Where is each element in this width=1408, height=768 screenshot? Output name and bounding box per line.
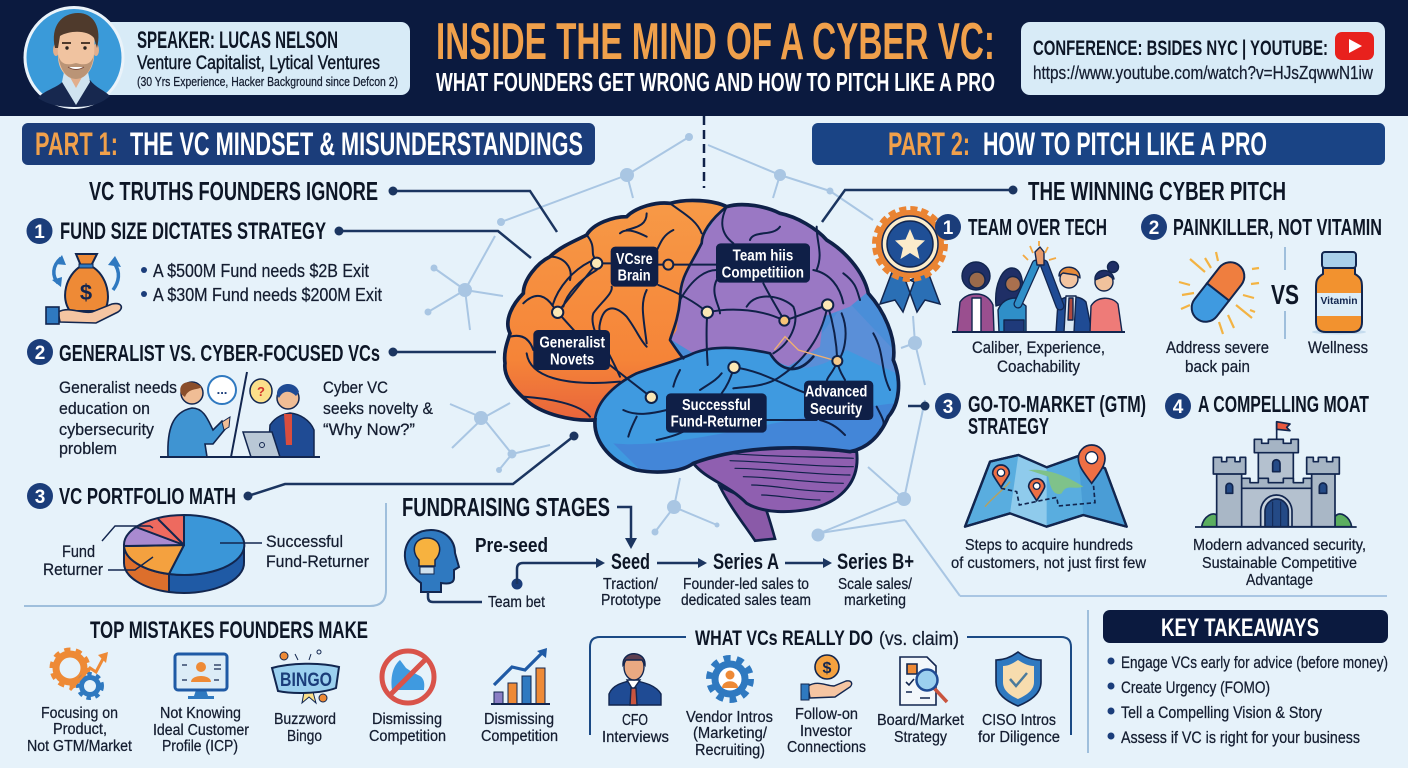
badge 1 bbox=[935, 214, 961, 240]
arrow: heading to seed bbox=[617, 507, 637, 549]
moat caption bbox=[1193, 537, 1366, 589]
badge 4: 4 bbox=[1173, 397, 1184, 418]
label: successful fund-returner bbox=[266, 532, 369, 571]
cyber VC text: seeks novelty & bbox=[323, 399, 434, 418]
painkiller caption: back pain bbox=[1185, 357, 1250, 376]
speaker name: SPEAKER: LUCAS NELSON bbox=[137, 27, 338, 54]
action: follow-on: Investor bbox=[800, 723, 852, 740]
icon: vitamin bottle bbox=[1312, 252, 1366, 334]
stage: seed: Seed bbox=[611, 549, 650, 574]
fund size bullets bbox=[141, 261, 382, 305]
icon: money bag and hand: $ bbox=[80, 280, 92, 305]
icon: gear with person bbox=[709, 658, 751, 700]
mistake: focusing on product bbox=[27, 705, 133, 755]
subtitle: WHAT FOUNDERS GET WRONG AND HOW TO PITCH LIKE A PRO bbox=[436, 67, 995, 97]
action: board strategy: Board/Market bbox=[877, 712, 965, 729]
GTM caption: Steps to acquire hundreds bbox=[965, 537, 1133, 554]
GTM caption bbox=[951, 537, 1146, 572]
label: fund returner bbox=[43, 542, 103, 579]
mistake: no ICP: Profile (ICP) bbox=[162, 738, 238, 755]
brain nodes bbox=[552, 258, 842, 403]
illustration: team high five bbox=[952, 241, 1125, 332]
connector bbox=[908, 402, 930, 410]
fund size heading: FUND SIZE DICTATES STRATEGY bbox=[60, 218, 326, 245]
speaker portrait bbox=[25, 8, 123, 108]
connector bbox=[388, 348, 496, 356]
mistake: no ICP bbox=[153, 705, 249, 755]
stage: seed: Prototype bbox=[601, 592, 661, 609]
takeaways banner bbox=[1103, 610, 1388, 643]
team bet label: Team bet bbox=[488, 594, 546, 611]
speaker role: Venture Capitalist, Lytical Ventures bbox=[137, 53, 380, 74]
brain label: Team hiis Competitiion: Competitiion bbox=[722, 265, 804, 282]
generalist heading: GENERALIST VS. CYBER-FOCUSED VCs bbox=[59, 340, 380, 366]
stage: series B+: Scale sales/ bbox=[838, 576, 913, 593]
takeaway 4: Assess if VC is right for your business bbox=[1121, 729, 1360, 747]
label: fund returner: Returner bbox=[43, 560, 103, 579]
team heading: TEAM OVER TECH bbox=[968, 214, 1107, 240]
mistake: no ICP: Not Knowing bbox=[160, 705, 241, 722]
icon: vitamin bottle: Vitamin bbox=[1320, 295, 1358, 307]
icon: bingo sign bbox=[272, 650, 339, 703]
mistake: focusing on product: Not GTM/Market bbox=[27, 738, 133, 755]
stage: series B+ bbox=[837, 549, 914, 609]
cyber VC text bbox=[323, 378, 434, 439]
cyber VC text: Cyber VC bbox=[323, 378, 388, 397]
team caption: Caliber, Experience, bbox=[972, 338, 1105, 357]
brain label: Successful Fund-Returner: Fund-Returner bbox=[671, 414, 762, 431]
icon: growth bar chart bbox=[491, 648, 550, 704]
stage: series A: Founder-led sales to bbox=[683, 576, 809, 593]
pre-seed label: Pre-seed bbox=[475, 535, 548, 557]
icon: no competition sign bbox=[382, 651, 434, 703]
brain network links bbox=[558, 263, 717, 397]
GTM caption: of customers, not just first few bbox=[951, 555, 1146, 572]
fund size bullets: A $500M Fund needs $2B Exit bbox=[153, 261, 369, 281]
icon: award rosette bbox=[875, 209, 945, 312]
action: vendor intros: Vendor Intros bbox=[686, 709, 773, 726]
brain label: Advanced Security bbox=[804, 381, 873, 420]
brain outline bbox=[505, 200, 899, 472]
VS: VS bbox=[1271, 279, 1299, 310]
brain label: Successful Fund-Returner bbox=[666, 393, 767, 433]
brain label: VCsre Brain: Brain bbox=[618, 268, 651, 285]
arrow: series A to series B bbox=[785, 558, 832, 568]
mistake: buzzword bingo: Bingo bbox=[287, 728, 322, 745]
icon: coin and hand: $ bbox=[823, 660, 832, 677]
youtube icon bbox=[1335, 32, 1374, 60]
stage: seed bbox=[601, 549, 661, 609]
moat caption: Modern advanced security, bbox=[1193, 537, 1366, 554]
label: successful fund-returner: Fund-Returner bbox=[266, 552, 369, 571]
mistake: buzzword bingo: Buzzword bbox=[274, 711, 336, 728]
illustration: two investors: ... bbox=[217, 382, 227, 397]
icon: bingo sign: BINGO bbox=[280, 670, 332, 691]
section: fund size bbox=[26, 218, 531, 324]
brain label: Generalist Novets: Generalist bbox=[539, 334, 605, 351]
section: what VCs really do bbox=[590, 627, 1071, 759]
GTM heading: STRATEGY bbox=[968, 413, 1049, 439]
badge 2: 2 bbox=[35, 343, 45, 364]
mistake: dismissing competition 2 bbox=[481, 711, 558, 745]
part 2 tag: PART 2: bbox=[888, 126, 970, 162]
stage: series A: Series A bbox=[713, 549, 779, 574]
brain label: Generalist Novets: Novets bbox=[550, 351, 594, 368]
mistake: buzzword bingo bbox=[274, 711, 336, 745]
action: CISO intros: CISO Intros bbox=[982, 712, 1056, 729]
header band bbox=[0, 0, 1408, 116]
connector bbox=[244, 432, 578, 500]
section: portfolio math bbox=[27, 432, 578, 593]
panel: key takeaways bbox=[1103, 610, 1388, 747]
action: CFO interviews: CFO bbox=[622, 712, 648, 729]
pitch: compelling moat bbox=[1165, 391, 1369, 589]
action: vendor intros: (Marketing/ bbox=[693, 725, 768, 742]
badge 1: 1 bbox=[34, 222, 45, 243]
brain label: VCsre Brain: VCsre bbox=[616, 251, 653, 268]
section: top mistakes bbox=[27, 617, 558, 755]
illustration: two investors bbox=[160, 372, 320, 457]
mistakes heading: TOP MISTAKES FOUNDERS MAKE bbox=[90, 617, 368, 644]
conference card bbox=[1021, 22, 1385, 95]
what VCs heading: WHAT VCs REALLY DO bbox=[695, 627, 873, 650]
generalist text: education on bbox=[59, 399, 150, 418]
frontal lobe: orange bbox=[506, 202, 724, 418]
badge 3: 3 bbox=[943, 397, 953, 418]
mistake: dismissing competition 2: Competition bbox=[481, 728, 558, 745]
badge 3: 3 bbox=[35, 487, 45, 508]
connector: VC truths to brain bbox=[388, 186, 557, 232]
icon: monitor with profile bbox=[175, 654, 227, 699]
painkiller caption: Address severe bbox=[1166, 338, 1269, 357]
pitch: go-to-market bbox=[908, 391, 1146, 572]
GTM heading: GO-TO-MARKET (GTM) bbox=[968, 391, 1146, 417]
icon: document and magnifier bbox=[900, 657, 947, 705]
section: generalist vs cyber bbox=[27, 339, 496, 458]
mistake: dismissing competition bbox=[369, 711, 446, 745]
takeaway 3: Tell a Compelling Vision & Story bbox=[1121, 704, 1323, 722]
painkiller caption bbox=[1166, 338, 1269, 376]
VS divider bbox=[1284, 247, 1286, 339]
arrow: seed to series A bbox=[657, 558, 707, 568]
team caption bbox=[972, 338, 1105, 376]
GTM heading bbox=[968, 391, 1146, 439]
icon: shield bbox=[996, 652, 1041, 706]
brain label: VCsre Brain bbox=[611, 247, 658, 287]
badge 4 bbox=[1165, 393, 1191, 419]
panel outline bbox=[590, 637, 1071, 735]
fund size bullets: A $30M Fund needs $200M Exit bbox=[153, 285, 382, 305]
illustration: castle bbox=[1195, 422, 1357, 527]
banner: part 2 bbox=[812, 123, 1385, 165]
mistake: dismissing competition 2: Dismissing bbox=[484, 711, 554, 728]
moat caption: Sustainable Competitive bbox=[1202, 555, 1357, 572]
action: vendor intros bbox=[686, 709, 773, 759]
mistake: no ICP: Ideal Customer bbox=[153, 722, 249, 739]
badge 1: 1 bbox=[943, 218, 954, 239]
brain lobes bbox=[497, 197, 907, 480]
cyber VC text: “Why Now?” bbox=[323, 420, 415, 439]
mistake: focusing on product: Focusing on bbox=[41, 705, 118, 722]
pie leaders bbox=[102, 526, 262, 570]
action: CFO interviews bbox=[602, 712, 669, 746]
illustration: map bbox=[965, 445, 1127, 527]
rays bbox=[1179, 252, 1259, 334]
pitch: painkiller bbox=[1141, 214, 1382, 376]
generalist text bbox=[59, 378, 177, 458]
badge 2 bbox=[1141, 214, 1167, 240]
illustration: two investors: ? bbox=[257, 384, 265, 399]
brain stem and cerebellum bbox=[693, 443, 857, 541]
badge 2 bbox=[27, 339, 53, 365]
badge 2: 2 bbox=[1149, 218, 1159, 239]
brain label: Successful Fund-Returner: Successful bbox=[682, 397, 751, 414]
stage: series B+: Series B+ bbox=[837, 549, 914, 574]
icon: coin and hand bbox=[801, 655, 852, 700]
title: INSIDE THE MIND OF A CYBER VC: bbox=[436, 13, 995, 71]
speaker background: (30 Yrs Experience, Hacker Background since Defcon 2) bbox=[137, 74, 398, 89]
temporal lobe: blue bbox=[596, 349, 897, 468]
brain label: Team hiis Competitiion: Team hiis bbox=[733, 248, 793, 265]
icon: head with bulb bbox=[405, 530, 459, 592]
generalist text: problem bbox=[59, 439, 117, 458]
action: follow-on: Connections bbox=[787, 739, 866, 756]
action: board strategy: Strategy bbox=[894, 729, 947, 746]
connector bbox=[334, 226, 531, 258]
portfolio heading: VC PORTFOLIO MATH bbox=[59, 483, 236, 509]
generalist text: Generalist needs bbox=[59, 378, 177, 397]
label: fund returner: Fund bbox=[62, 542, 95, 561]
label: successful fund-returner: Successful bbox=[266, 532, 343, 551]
pitch: team over tech bbox=[935, 214, 1125, 376]
centre dashed divider bbox=[703, 116, 705, 188]
action: CISO intros bbox=[978, 712, 1060, 746]
heading: winning pitch: THE WINNING CYBER PITCH bbox=[1028, 176, 1286, 206]
brain label: Advanced Security: Security bbox=[810, 401, 863, 418]
stage: series A bbox=[681, 549, 811, 609]
connector: head to team bet bbox=[428, 592, 482, 602]
action: board strategy bbox=[877, 712, 965, 746]
banner: part 1 bbox=[22, 123, 595, 165]
mistake: dismissing competition: Competition bbox=[369, 728, 446, 745]
background network bbox=[424, 133, 1387, 596]
moat caption: Advantage bbox=[1246, 572, 1313, 589]
speaker card bbox=[25, 8, 410, 108]
brain label: Generalist Novets bbox=[533, 330, 610, 370]
vitamin caption: Wellness bbox=[1308, 338, 1368, 357]
generalist text: cybersecurity bbox=[59, 420, 154, 439]
connector: winning pitch to brain bbox=[822, 186, 1018, 222]
team caption: Coachability bbox=[997, 357, 1080, 376]
brain label: Team hiis Competitiion bbox=[716, 243, 810, 283]
section: fundraising stages bbox=[402, 492, 914, 611]
action: CFO interviews: Interviews bbox=[602, 729, 669, 746]
takeaways banner: KEY TAKEAWAYS bbox=[1161, 614, 1319, 642]
part 1 heading: THE VC MINDSET & MISUNDERSTANDINGS bbox=[130, 126, 583, 162]
icon: pill bbox=[1186, 257, 1250, 327]
brain label: Advanced Security: Advanced bbox=[805, 384, 867, 401]
action: CISO intros: for Diligence bbox=[978, 729, 1060, 746]
what VCs heading: (vs. claim) bbox=[879, 629, 959, 650]
badge 3 bbox=[27, 483, 53, 509]
part 2 heading: HOW TO PITCH LIKE A PRO bbox=[983, 126, 1267, 162]
mistake: dismissing competition: Dismissing bbox=[372, 711, 442, 728]
part 1 tag: PART 1: bbox=[35, 126, 118, 162]
icon: money bag and hand bbox=[46, 254, 121, 324]
arrow: pre-seed to seed bbox=[512, 558, 605, 590]
heading: VC truths: VC TRUTHS FOUNDERS IGNORE bbox=[89, 176, 378, 206]
icon: CFO bbox=[609, 654, 661, 705]
rear blue highlight bbox=[798, 306, 896, 372]
action: vendor intros: Recruiting) bbox=[695, 742, 765, 759]
parietal lobe: purple bbox=[672, 200, 870, 372]
stage: seed: Traction/ bbox=[603, 576, 659, 593]
stage: series B+: marketing bbox=[844, 592, 906, 609]
action: follow-on bbox=[787, 706, 866, 756]
icon: gears and arrow bbox=[52, 650, 108, 698]
fundraising heading: FUNDRAISING STAGES bbox=[402, 492, 610, 522]
brain folds bbox=[510, 203, 890, 440]
pie chart bbox=[124, 515, 244, 593]
mistake: focusing on product: Product, bbox=[53, 721, 107, 738]
action: follow-on: Follow-on bbox=[795, 706, 858, 723]
badge 1 bbox=[26, 218, 52, 244]
stage: series A: dedicated sales team bbox=[681, 592, 811, 609]
brain illustration bbox=[497, 197, 907, 541]
takeaway 2: Create Urgency (FOMO) bbox=[1121, 679, 1270, 697]
badge 3 bbox=[935, 393, 961, 419]
